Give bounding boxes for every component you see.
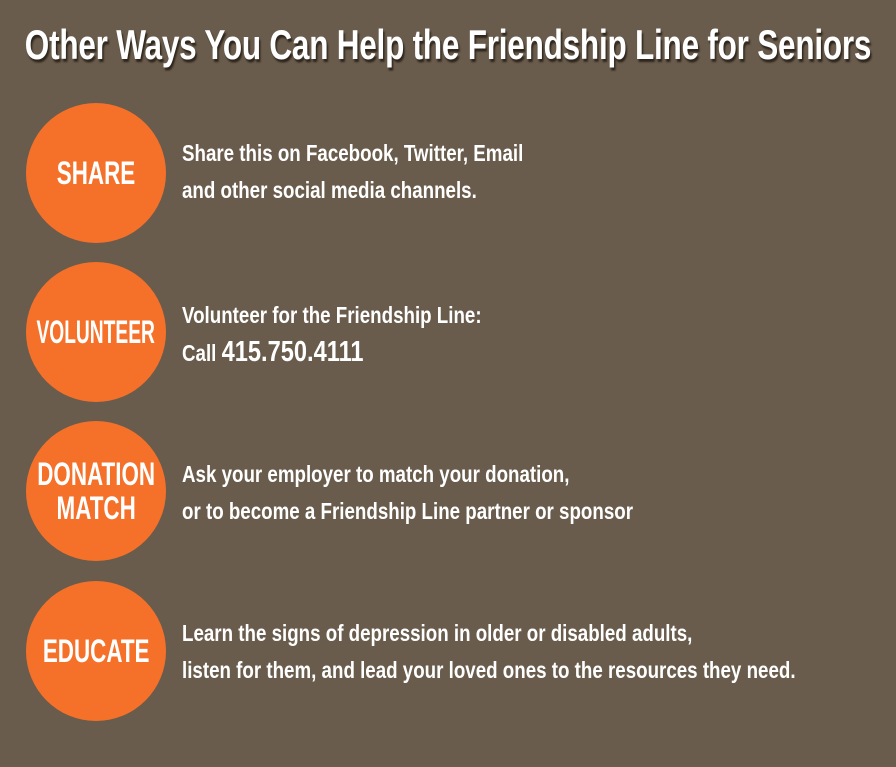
text: donation match: Ask your employer to match your donation, <box>182 461 569 487</box>
text: donation match: or to become a Friendship Line partner or sponsor <box>182 498 633 524</box>
title: Other Ways You Can Help the Friendship Line for Seniors <box>25 21 871 68</box>
icon: donation match circle <box>26 421 166 561</box>
icon: volunteer circle <box>26 262 166 402</box>
text: share: Share this on Facebook, Twitter, Email <box>182 140 523 166</box>
text: educate: listen for them, and lead your loved ones to the resources they need. <box>182 657 796 683</box>
text: share <box>182 140 523 203</box>
text: share: and other social media channels. <box>182 177 477 203</box>
panel: donation match <box>26 421 633 561</box>
icon: share circle: SHARE <box>57 155 135 191</box>
text: educate: Learn the signs of depression in older or disabled adults, <box>182 620 692 646</box>
text: volunteer: Call 415.750.4111 <box>182 336 364 368</box>
icon: donation match circle: DONATION <box>37 456 155 492</box>
icon: educate circle <box>26 581 166 721</box>
icon: educate circle: EDUCATE <box>43 633 149 669</box>
panel: educate <box>26 581 796 721</box>
panel: share <box>26 103 523 243</box>
text: volunteer: Volunteer for the Friendship Line: <box>182 302 482 328</box>
panel: volunteer <box>26 262 482 402</box>
text: educate <box>182 620 796 683</box>
text: donation match <box>182 461 633 524</box>
icon: donation match circle: MATCH <box>56 490 136 526</box>
icon: volunteer circle: VOLUNTEER <box>37 314 155 350</box>
text: volunteer <box>182 302 482 368</box>
icon: share circle <box>26 103 166 243</box>
